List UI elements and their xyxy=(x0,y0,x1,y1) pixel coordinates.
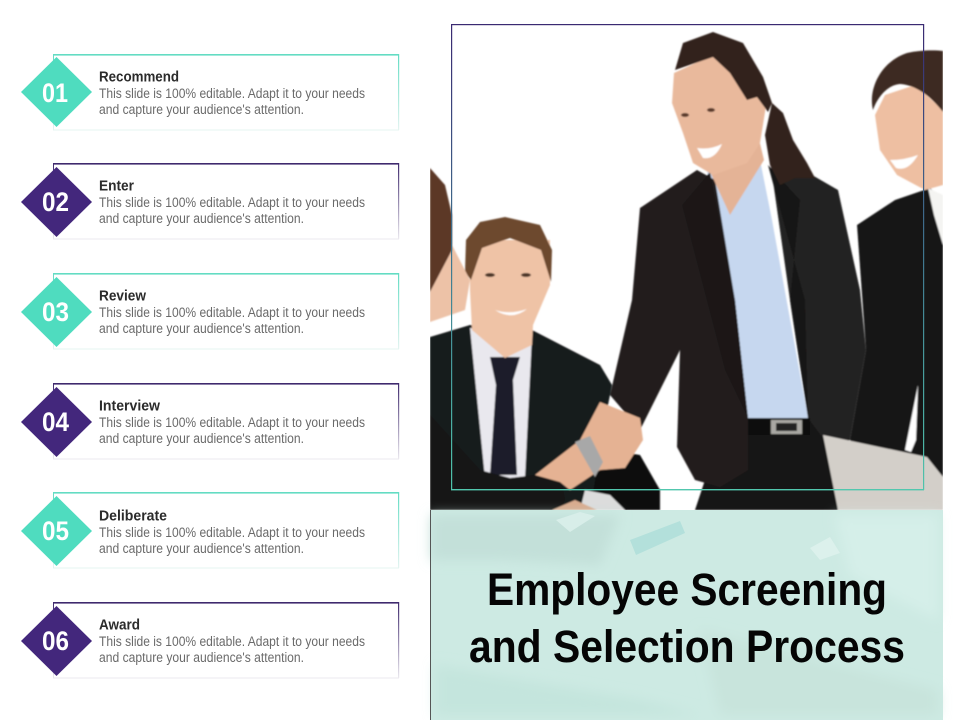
title: Employee Screening xyxy=(487,564,887,615)
panel: step 05 Deliberate: Deliberate xyxy=(99,508,167,524)
panel: step 02 Enter: This slide is 100% editable. Adapt it to your needs xyxy=(99,195,365,210)
panel: step 01 Recommend xyxy=(21,54,399,130)
panel: step 04 Interview: This slide is 100% editable. Adapt it to your needs xyxy=(99,415,365,430)
panel: step 06 Award: Award xyxy=(99,618,140,634)
title: and Selection Process xyxy=(469,621,905,672)
panel: step 05 Deliberate: and capture your audience's attention. xyxy=(99,541,304,556)
panel: step 05 Deliberate: This slide is 100% editable. Adapt it to your needs xyxy=(99,525,365,540)
panel: step 03 Review: Review xyxy=(99,289,147,305)
laptop xyxy=(823,435,943,510)
panel: step 03 Review: This slide is 100% editable. Adapt it to your needs xyxy=(99,305,365,320)
panel: step 06 Award: 06 xyxy=(42,626,69,656)
panel: step 01 Recommend: and capture your audience's attention. xyxy=(99,102,304,117)
panel: step 05 Deliberate xyxy=(21,492,399,568)
seated man xyxy=(430,216,613,506)
panel: step 06 Award xyxy=(21,602,399,678)
panel: step 03 Review: 03 xyxy=(42,297,69,327)
panel: step 05 Deliberate: 05 xyxy=(42,516,69,546)
frame around photo xyxy=(451,24,924,490)
panel: step 02 Enter: Enter xyxy=(99,179,134,195)
panel: step 04 Interview xyxy=(21,383,399,460)
panel: step 01 Recommend: Recommend xyxy=(99,70,179,86)
panel: step 01 Recommend: This slide is 100% editable. Adapt it to your needs xyxy=(99,86,365,101)
photo: business people shaking hands xyxy=(430,32,943,510)
panel: step 04 Interview: Interview xyxy=(99,399,161,415)
panel: step 06 Award: and capture your audience's attention. xyxy=(99,650,304,665)
panel: step 02 Enter: 02 xyxy=(42,187,69,217)
right woman xyxy=(850,50,943,510)
handshake and foreground arm xyxy=(482,400,660,510)
panel: step 02 Enter xyxy=(21,163,399,240)
panel: step 06 Award: This slide is 100% editable. Adapt it to your needs xyxy=(99,634,365,649)
panel: step 04 Interview: 04 xyxy=(42,407,69,437)
left person head xyxy=(430,168,470,322)
panel: step 01 Recommend: 01 xyxy=(42,78,68,108)
title xyxy=(469,564,905,672)
panel: step 03 Review xyxy=(21,273,399,350)
panel: step 02 Enter: and capture your audience's attention. xyxy=(99,211,304,226)
panel: step 03 Review: and capture your audience's attention. xyxy=(99,321,304,336)
central woman xyxy=(610,32,866,510)
panel: translucent title panel xyxy=(430,510,943,720)
panel: step 04 Interview: and capture your audience's attention. xyxy=(99,431,304,446)
